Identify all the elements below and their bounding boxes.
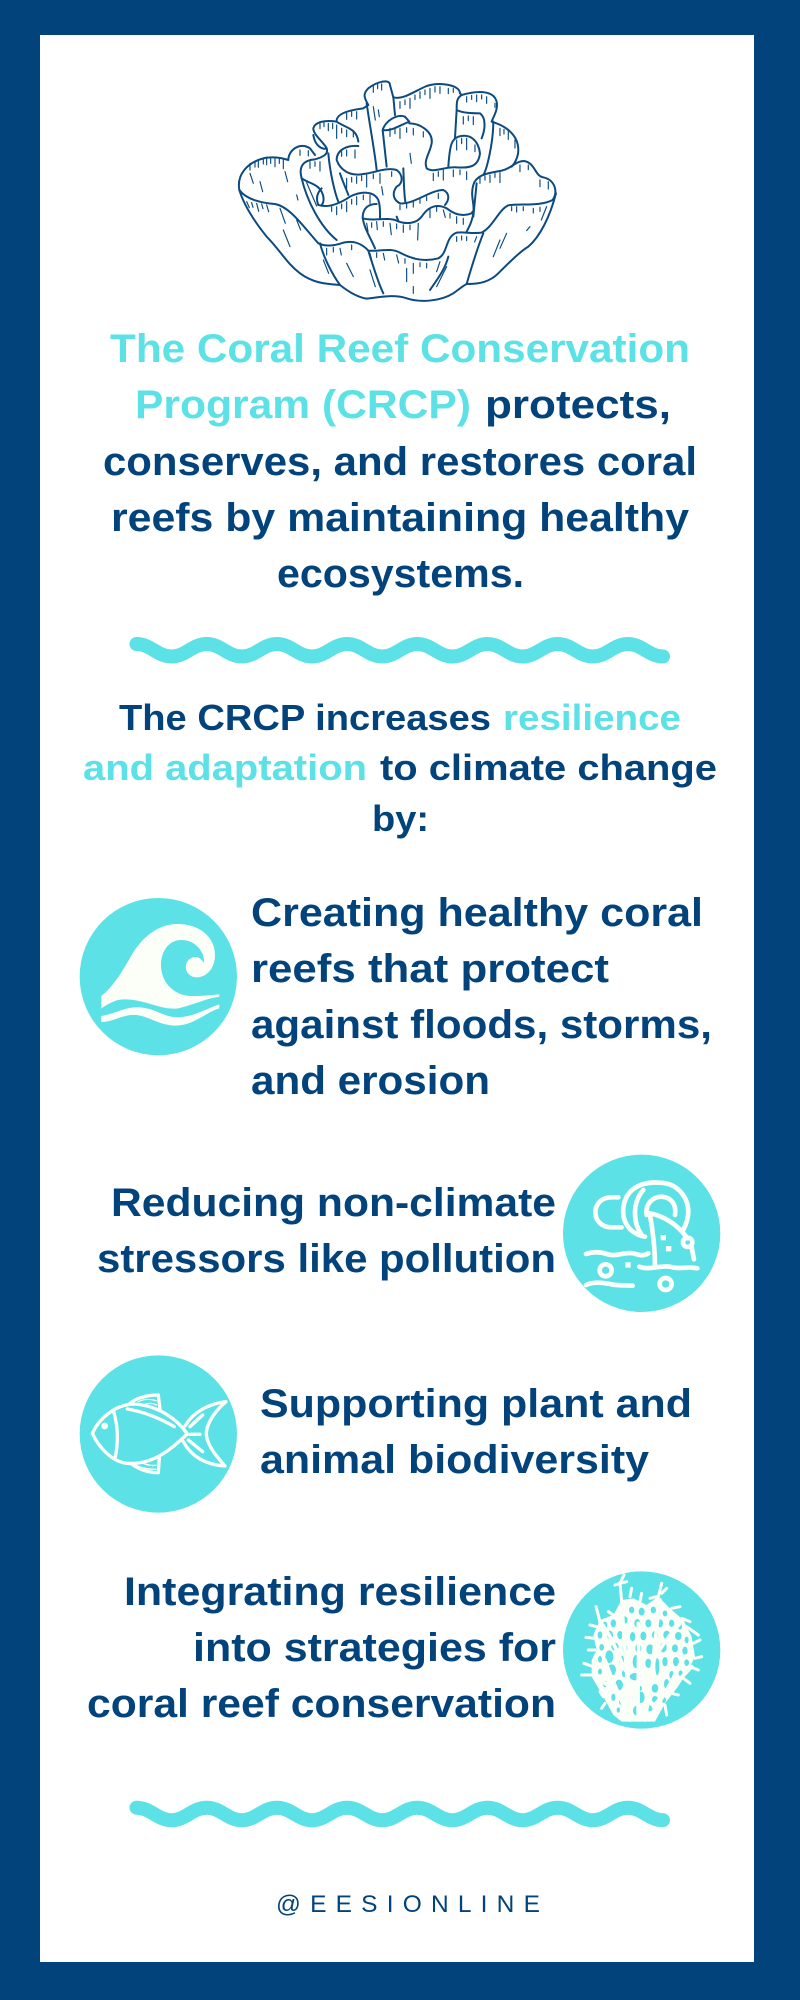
item 2 text: stressors like pollution [97,1237,556,1281]
title: The Coral Reef Conservation [110,327,690,371]
footer handle: @EESIONLINE [276,1891,549,1918]
subheading: to climate change [380,747,717,788]
title: reefs by maintaining healthy [111,496,690,540]
item 4 text: into strategies for [193,1626,556,1670]
title: ecosystems. [277,552,524,596]
title: protects, [485,383,671,427]
title: conserves, and restores coral [103,440,697,484]
item 2 text: Reducing non-climate [111,1181,556,1225]
item 2 text [97,1181,556,1281]
icon: fish [80,1355,237,1513]
item 1 text [251,891,712,1103]
item 4 text: Integrating resilience [124,1570,556,1614]
wave divider bottom [136,1808,663,1820]
subheading: and adaptation [83,747,367,788]
item 3 text: animal biodiversity [260,1438,650,1482]
icon: coral illustration [239,81,556,301]
item 1 text: Creating healthy coral [251,891,703,935]
title: Program (CRCP) [135,383,471,427]
item 3 text [260,1382,692,1482]
wave divider top [136,644,663,656]
icon: pollution pipe [563,1155,720,1312]
item 4 text: coral reef conservation [87,1682,556,1726]
item 4 text [87,1570,556,1726]
subheading: The CRCP increases [119,697,491,738]
subheading [83,697,717,839]
icon: white coral [563,1571,720,1729]
item 3 text: Supporting plant and [260,1382,692,1426]
item 1 text: reefs that protect [251,947,609,991]
item 1 text: and erosion [251,1059,490,1103]
subheading: resilience [503,697,681,738]
icon: wave [80,898,237,1055]
subheading: by: [372,798,429,839]
item 1 text: against floods, storms, [251,1003,712,1047]
title [103,327,697,596]
